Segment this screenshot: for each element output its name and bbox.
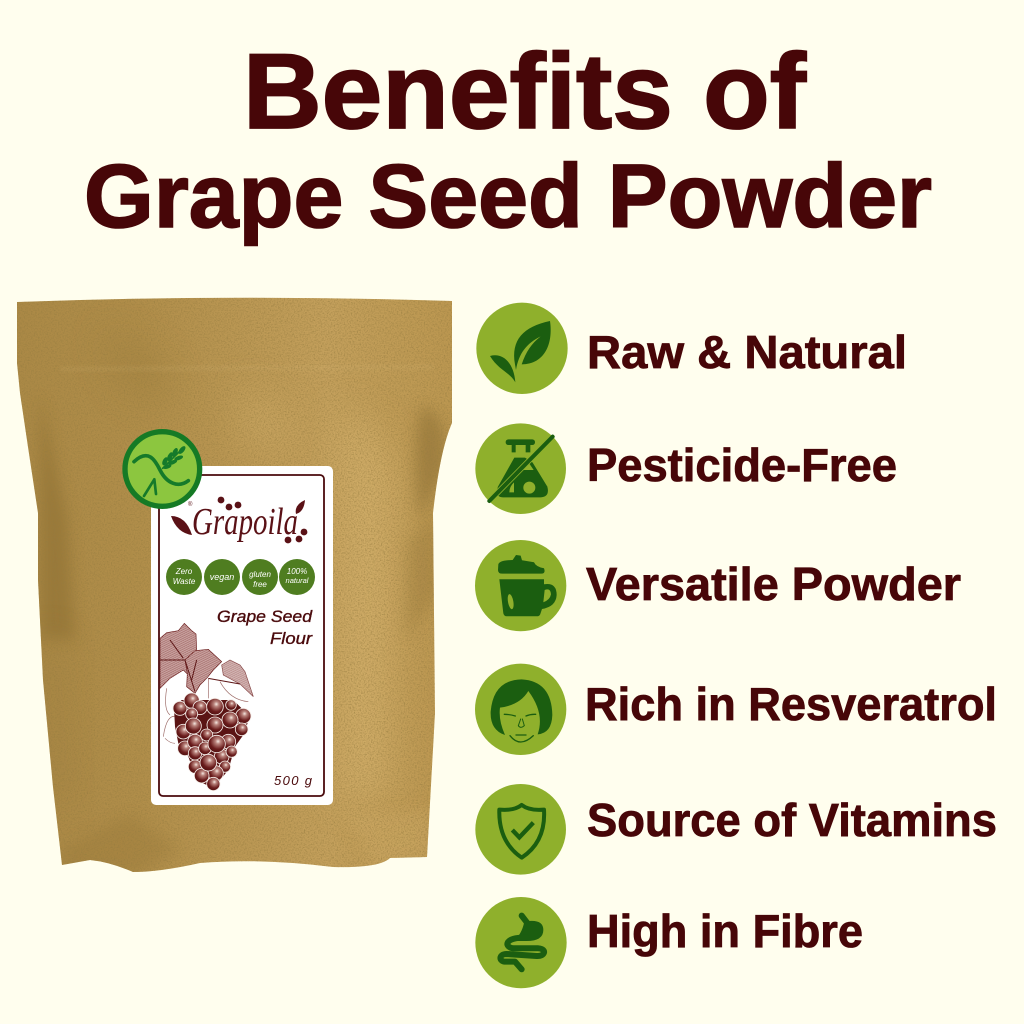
claim badges: natural xyxy=(286,576,309,585)
benefit: High in Fibre xyxy=(475,897,863,988)
claim badges: Zero xyxy=(175,567,193,576)
product name: Grape Seed xyxy=(217,607,313,626)
icon: digestive tract xyxy=(475,897,567,988)
weight: 500 g xyxy=(274,773,313,788)
icon: shield xyxy=(475,784,566,875)
label: High in Fibre xyxy=(587,905,863,957)
product pouch xyxy=(17,298,452,872)
icon: leaf xyxy=(476,303,568,394)
label: Raw & Natural xyxy=(587,326,907,378)
label: Source of Vitamins xyxy=(587,794,997,846)
benefit: Versatile Powder xyxy=(475,540,961,631)
benefit: Rich in Resveratrol xyxy=(475,664,997,755)
icon: crossed flask xyxy=(475,423,566,514)
brand logo: Grapoila xyxy=(192,501,298,543)
product name: Flour xyxy=(270,629,313,648)
benefit: Raw & Natural xyxy=(476,303,907,394)
label: Versatile Powder xyxy=(586,558,961,610)
claim badges: Waste xyxy=(173,577,196,586)
brand logo xyxy=(171,497,307,543)
title: Grape Seed Powder xyxy=(84,147,932,247)
benefit: Source of Vitamins xyxy=(475,784,997,875)
grape illustration xyxy=(160,623,253,791)
icon: cup xyxy=(475,540,566,631)
product label xyxy=(151,466,333,805)
kraft bag body xyxy=(17,298,452,872)
label: Pesticide-Free xyxy=(587,439,897,491)
title: Benefits of xyxy=(243,31,806,151)
product name xyxy=(217,607,313,648)
benefit: Pesticide-Free xyxy=(475,423,897,514)
claim badges: gluten xyxy=(249,570,271,579)
claim badges xyxy=(166,559,315,595)
claim badges: vegan xyxy=(210,572,234,582)
gluten-free badge xyxy=(125,432,200,506)
brand logo: ® xyxy=(188,501,193,508)
label: Rich in Resveratrol xyxy=(585,678,997,730)
claim badges: 100% xyxy=(287,567,307,576)
claim badges: free xyxy=(253,580,267,589)
title xyxy=(84,31,932,247)
icon: face xyxy=(475,664,566,755)
